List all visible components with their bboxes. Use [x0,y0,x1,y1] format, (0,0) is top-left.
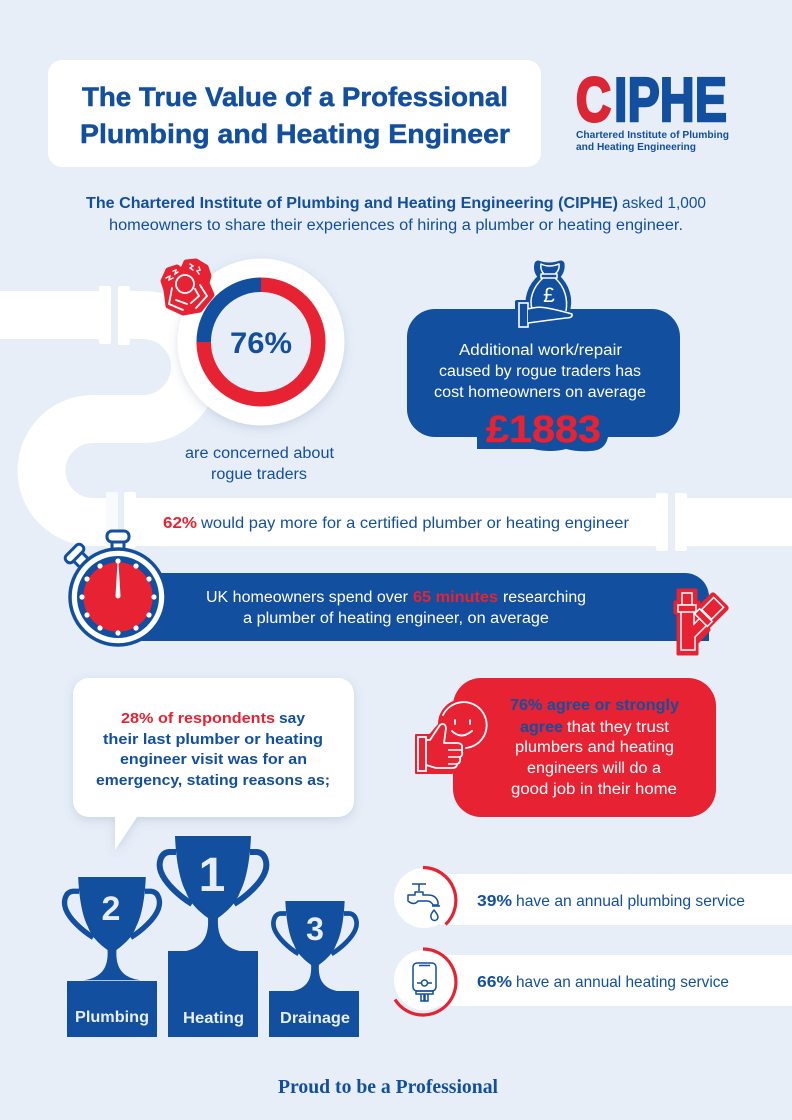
speech bubble: emergency visits: engineer visit was for an [120,751,307,768]
caption: are concerned about rogue traders: are concerned about [185,445,335,462]
panel: trust statistic: plumbers and heating [515,739,674,756]
chart: trophy 3 drainage [269,901,359,1037]
logo: CIPHE: and Heating Engineering [576,141,696,153]
row: heating service 66%: have an annual heating service [516,974,729,991]
panel: research time bar [120,573,709,641]
icon: money bag on hand [515,264,572,330]
row: heating service 66% [394,949,792,1015]
icon: stressed person [163,261,212,313]
caption: are concerned about rogue traders: rogue traders [211,466,307,483]
logo: CIPHE: IPHE [614,66,727,135]
panel: additional work cost [407,309,680,451]
row: plumbing service 39% [394,868,792,928]
panel: research time bar: UK homeowners spend over [206,589,408,606]
panel: additional work cost: caused by rogue traders has [439,363,641,380]
icon: pipe fitting [675,590,730,654]
panel: additional work cost: £1883 [486,409,601,451]
title card: The True Value of a Professional [82,82,508,112]
speech bubble: emergency visits: their last plumber or heating [103,731,323,748]
icon: money bag on hand: £ [543,284,555,307]
logo: CIPHE: Chartered Institute of Plumbing [576,129,729,141]
title card [48,60,541,167]
panel: research time bar: researching [503,589,586,606]
speech bubble: emergency visits [73,678,354,850]
chart: trophy 2 plumbing [65,877,159,1037]
panel: trust statistic: engineers will do a [527,760,661,777]
icon: stopwatch [64,531,166,645]
panel: trust statistic: good job in their home [511,781,677,798]
chart: trophy 3 drainage: Drainage [280,1010,350,1027]
panel: trust statistic: 76% agree or strongly [510,697,679,714]
panel: additional work cost: cost homeowners on average [434,384,646,401]
logo: CIPHE: C [576,66,611,135]
panel: trust statistic: agree [520,719,563,736]
intro text [86,195,706,234]
panel: research time bar: a plumber of heating engineer, on average [243,610,549,627]
chart: trophy 2 plumbing: 2 [102,890,120,928]
logo: CIPHE [576,66,729,153]
chart: trophy 3 drainage: 3 [306,911,324,947]
chart: trophy 2 plumbing: Plumbing [75,1009,149,1026]
panel: trust statistic: that they trust [567,719,670,736]
intro text: The Chartered Institute of Plumbing and Heating Engineering (CIPHE) [86,195,618,212]
panel: research time bar: 65 minutes [413,589,498,606]
speech bubble: emergency visits: say [279,710,306,727]
text: 62% would pay more: 62% [163,515,197,532]
speech bubble: emergency visits: 28% of respondents [121,710,275,727]
caption: are concerned about rogue traders [185,445,335,483]
title card: Plumbing and Heating Engineer [80,119,511,149]
icon: thumbs up smiley [416,699,488,773]
donut chart: 76% concerned about rogue traders: 76% [230,327,292,360]
chart: trophy 1 heating: Heating [183,1010,244,1027]
donut chart: 76% concerned about rogue traders [178,258,344,426]
panel: trust statistic [453,678,716,817]
text: 62% would pay more: would pay more for a certified plumber or heating engineer [200,515,630,532]
panel: additional work cost: Additional work/repair [459,342,622,359]
white pipe [0,285,792,552]
intro text: asked 1,000 [622,195,706,212]
row: plumbing service 39%: 39% [477,893,512,910]
chart: trophy 1 heating: 1 [199,849,225,902]
row: plumbing service 39%: have an annual plumbing service [516,893,745,910]
footer tagline: Proud to be a Professional [278,1077,499,1098]
intro text: homeowners to share their experiences of hiring a plumber or heating engineer. [109,217,683,234]
row: heating service 66%: 66% [477,974,512,991]
speech bubble: emergency visits: emergency, stating reasons as; [96,772,330,789]
chart: trophy 1 heating [160,836,266,1037]
